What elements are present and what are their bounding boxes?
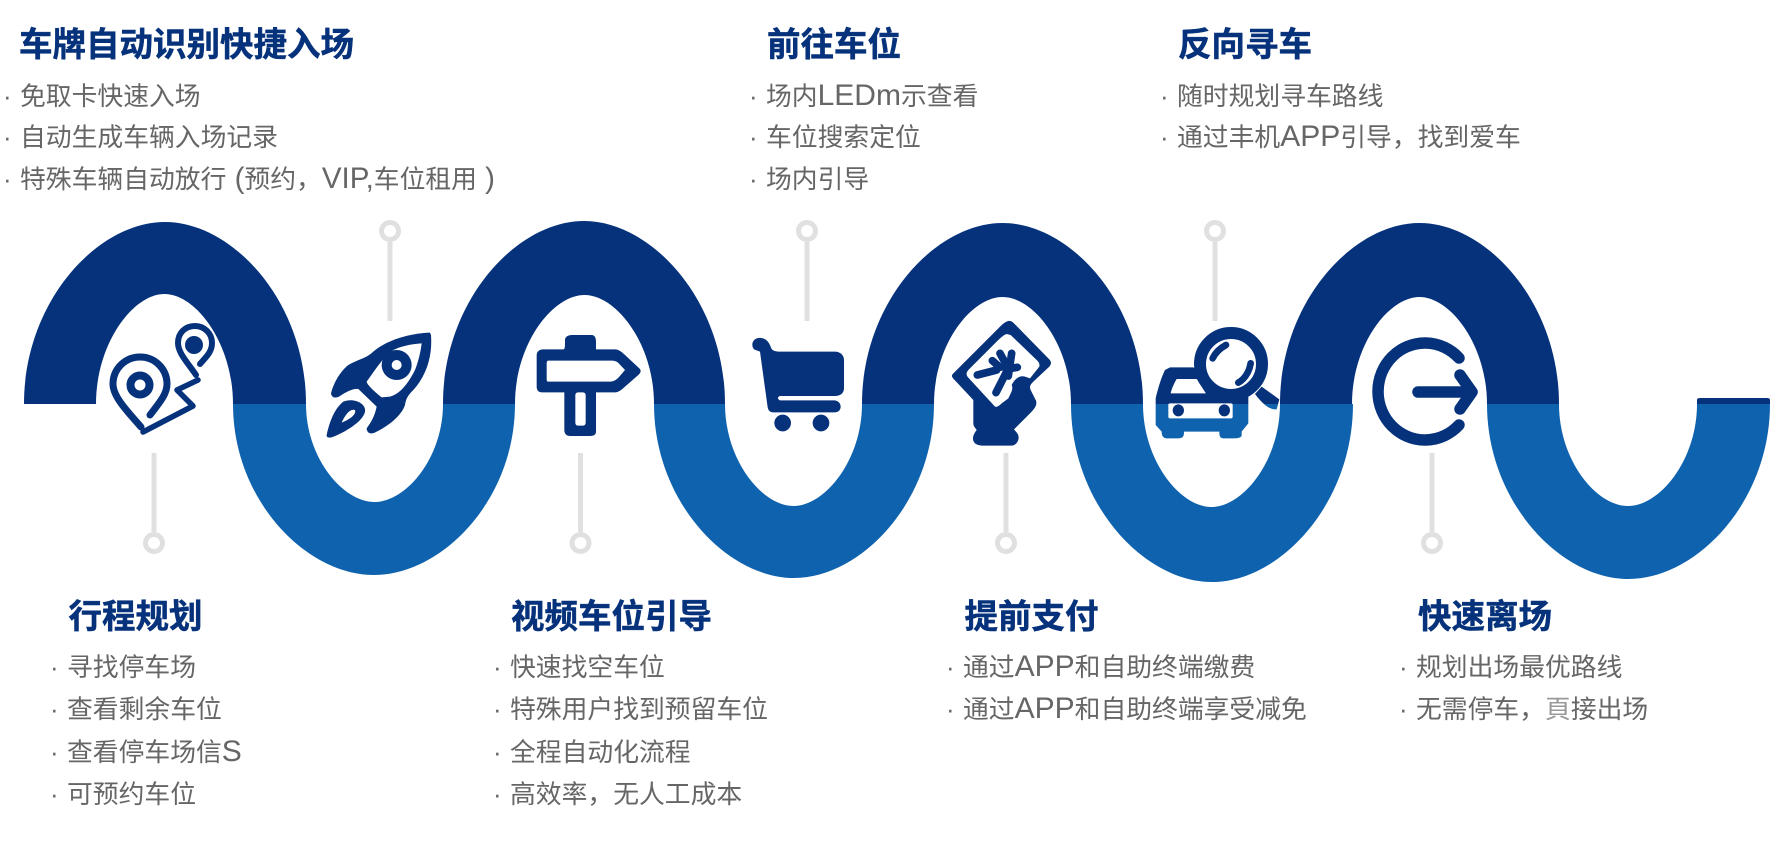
- list: 无需停车，頁接出场: [1416, 695, 1648, 724]
- heading: 前往车位: [767, 27, 901, 64]
- list: ·: [1399, 654, 1408, 682]
- list: 通过丰机APP引导，找到爱车: [1177, 120, 1521, 153]
- list: ·: [3, 166, 12, 194]
- connector: step 1: [146, 453, 162, 552]
- wave ribbon: [24, 221, 1770, 582]
- panel: 前往车位: [749, 27, 978, 194]
- list: 车位搜索定位: [766, 123, 921, 152]
- icon: rocket: [327, 333, 431, 438]
- connector: step 3: [572, 453, 589, 552]
- list: 场内LEDm示查看: [766, 79, 978, 112]
- ribbon: light lower arches: [233, 404, 1770, 582]
- icon: shopping cart: [752, 338, 844, 431]
- list: 自动生成车辆入场记录: [20, 123, 278, 152]
- list: [1399, 653, 1648, 724]
- list: 规划出场最优路线: [1416, 653, 1622, 682]
- list: ·: [50, 696, 59, 724]
- panel: 提前支付: [946, 599, 1307, 725]
- icon: hand holding parking card: [952, 321, 1051, 446]
- list: 可预约车位: [67, 780, 196, 809]
- list: ·: [1160, 83, 1169, 111]
- ribbon: dark upper arches: [24, 221, 1770, 404]
- list: 免取卡快速入场: [20, 82, 201, 111]
- icon: exit arrow: [1378, 343, 1472, 440]
- icon: car with magnifier: [1156, 333, 1279, 438]
- list: ·: [946, 696, 955, 724]
- panel: 车牌自动识别快捷入场: [3, 27, 495, 195]
- list: ·: [1160, 124, 1169, 152]
- heading: 快速离场: [1418, 599, 1552, 636]
- list: ·: [493, 781, 502, 809]
- list: 随时规划寻车路线: [1177, 82, 1383, 111]
- list: ·: [749, 166, 758, 194]
- list: 查看剩余车位: [67, 695, 222, 724]
- icon: signpost: [537, 335, 641, 436]
- list: 通过APP和自助终端享受减免: [963, 692, 1307, 725]
- list: [1160, 82, 1521, 153]
- panel: 视频车位引导: [493, 599, 768, 809]
- list: ·: [50, 739, 59, 767]
- heading: 车牌自动识别快捷入场: [19, 27, 354, 64]
- heading: 行程规划: [68, 599, 202, 636]
- heading: 反向寻车: [1178, 27, 1312, 64]
- heading: 提前支付: [964, 599, 1098, 636]
- heading: 视频车位引导: [511, 599, 712, 636]
- connector: step 6: [1206, 222, 1224, 321]
- list: [946, 650, 1307, 725]
- panel: 快速离场: [1399, 599, 1648, 724]
- list: ·: [946, 654, 955, 682]
- panel: 反向寻车: [1160, 27, 1521, 153]
- list: ·: [493, 696, 502, 724]
- icon: map pins with route: [113, 326, 212, 432]
- list: ·: [749, 124, 758, 152]
- connector: step 7: [1424, 453, 1440, 552]
- list: 特殊车辆自动放行 (预约，VIP,车位租用 ): [20, 162, 495, 195]
- list: ·: [493, 654, 502, 682]
- list: 特殊用户找到预留车位: [510, 695, 768, 724]
- list: 寻找停车场: [67, 653, 196, 682]
- list: ·: [50, 654, 59, 682]
- list: 场内引导: [766, 165, 869, 194]
- list: ·: [1399, 696, 1408, 724]
- list: 全程自动化流程: [510, 738, 691, 767]
- list: 通过APP和自助终端缴费: [963, 650, 1255, 683]
- list: ·: [749, 83, 758, 111]
- connector: step 5: [998, 453, 1014, 552]
- panel: 行程规划: [50, 599, 242, 809]
- connector: step 2: [382, 222, 398, 321]
- list: [749, 79, 978, 194]
- list: 快速找空车位: [510, 653, 665, 682]
- list: ·: [3, 124, 12, 152]
- list: [50, 653, 242, 809]
- list: 高效率，无人工成本: [510, 780, 742, 809]
- list: ·: [50, 781, 59, 809]
- list: 查看停车场信S: [67, 735, 242, 768]
- list: [3, 82, 495, 195]
- list: ·: [3, 83, 12, 111]
- connector: step 4: [798, 222, 816, 321]
- list: ·: [493, 739, 502, 767]
- list: [493, 653, 768, 809]
